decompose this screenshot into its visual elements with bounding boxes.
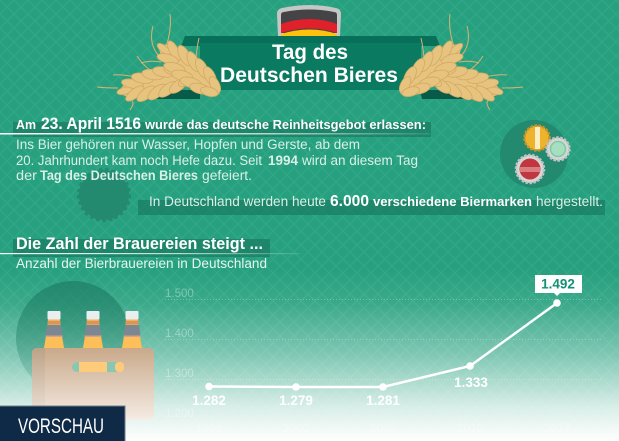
icon: wheat right bbox=[389, 14, 523, 110]
callout: 6.000 Biermarken: hergestellt. bbox=[536, 194, 603, 209]
icon: yellow cap bbox=[524, 126, 550, 150]
y axis labels: 1.300 bbox=[165, 368, 194, 380]
heading: Brauereien: Die Zahl der Brauereien steigt ... bbox=[16, 235, 263, 253]
value labels: 1.282 bbox=[192, 393, 226, 408]
headline: Reinheitsgebot: Am bbox=[16, 117, 36, 132]
icon: red cap bbox=[516, 155, 544, 183]
value labels: 1.333 bbox=[454, 375, 488, 390]
icon: bottle caps bbox=[500, 120, 570, 188]
value labels bbox=[192, 375, 488, 408]
icon: green cap bbox=[546, 138, 570, 160]
headline: Reinheitsgebot: 23. April 1516 bbox=[41, 115, 141, 133]
x axis labels bbox=[196, 421, 571, 435]
callout: 6.000 Biermarken: verschiedene Biermarken bbox=[373, 194, 532, 209]
icon: beer crate bbox=[16, 281, 154, 420]
y axis labels: 1.400 bbox=[165, 328, 194, 340]
text block: paragraph: Tag des Deutschen Bieres bbox=[40, 168, 198, 183]
x axis labels: 2010 bbox=[457, 421, 484, 435]
heading: Brauereien bbox=[0, 235, 300, 257]
value labels: 1.281 bbox=[366, 393, 400, 408]
x axis labels: 2000 bbox=[283, 421, 310, 435]
text block: paragraph: Ins Bier gehören nur Wasser, Hopfen und Gerste, ab dem bbox=[16, 137, 360, 152]
data points bbox=[205, 299, 561, 391]
callout: 6.000 Biermarken: 6.000 bbox=[330, 193, 369, 210]
callout: 6.000 Biermarken bbox=[138, 193, 605, 215]
text block: paragraph: 1994 bbox=[268, 153, 298, 168]
text block: paragraph: 20. Jahrhundert kam noch Hefe dazu. Seit bbox=[16, 153, 262, 168]
y axis labels bbox=[165, 288, 194, 420]
badge: Vorschau bbox=[0, 406, 125, 441]
icon: German flag shield bbox=[277, 5, 341, 36]
icon: dark cap badge bbox=[78, 169, 130, 221]
headline: Reinheitsgebot bbox=[0, 115, 431, 137]
text block: paragraph bbox=[16, 137, 418, 183]
x axis labels: 1995 bbox=[196, 421, 223, 435]
data line bbox=[209, 303, 557, 387]
callout: 6.000 Biermarken: In Deutschland werden heute bbox=[149, 194, 326, 209]
title banner bbox=[153, 36, 468, 99]
grid lines bbox=[165, 300, 602, 380]
callout: 1.492 bbox=[535, 275, 582, 296]
text block: paragraph: wird an diesem Tag bbox=[301, 153, 418, 168]
x axis labels: 2017 bbox=[544, 421, 571, 435]
text block: paragraph: der bbox=[16, 168, 38, 183]
subtitle: Anzahl der Bierbrauereien in Deutschland bbox=[16, 256, 267, 271]
y axis labels: 1.500 bbox=[165, 288, 194, 300]
title: Tag des bbox=[272, 40, 348, 64]
value labels: 1.279 bbox=[279, 393, 313, 408]
headline: Reinheitsgebot: wurde das deutsche Reinheitsgebot erlassen: bbox=[144, 117, 426, 132]
badge: Vorschau: VORSCHAU bbox=[18, 415, 104, 438]
title: Deutschen Bieres bbox=[220, 63, 398, 87]
y axis labels: 1.200 bbox=[165, 408, 194, 420]
line chart bbox=[165, 275, 602, 435]
text block: paragraph: gefeiert. bbox=[202, 168, 252, 183]
title bbox=[220, 40, 398, 87]
callout: 1.492: 1.492 bbox=[541, 276, 575, 292]
x axis labels: 2005 bbox=[370, 421, 397, 435]
icon: wheat left bbox=[97, 14, 231, 110]
